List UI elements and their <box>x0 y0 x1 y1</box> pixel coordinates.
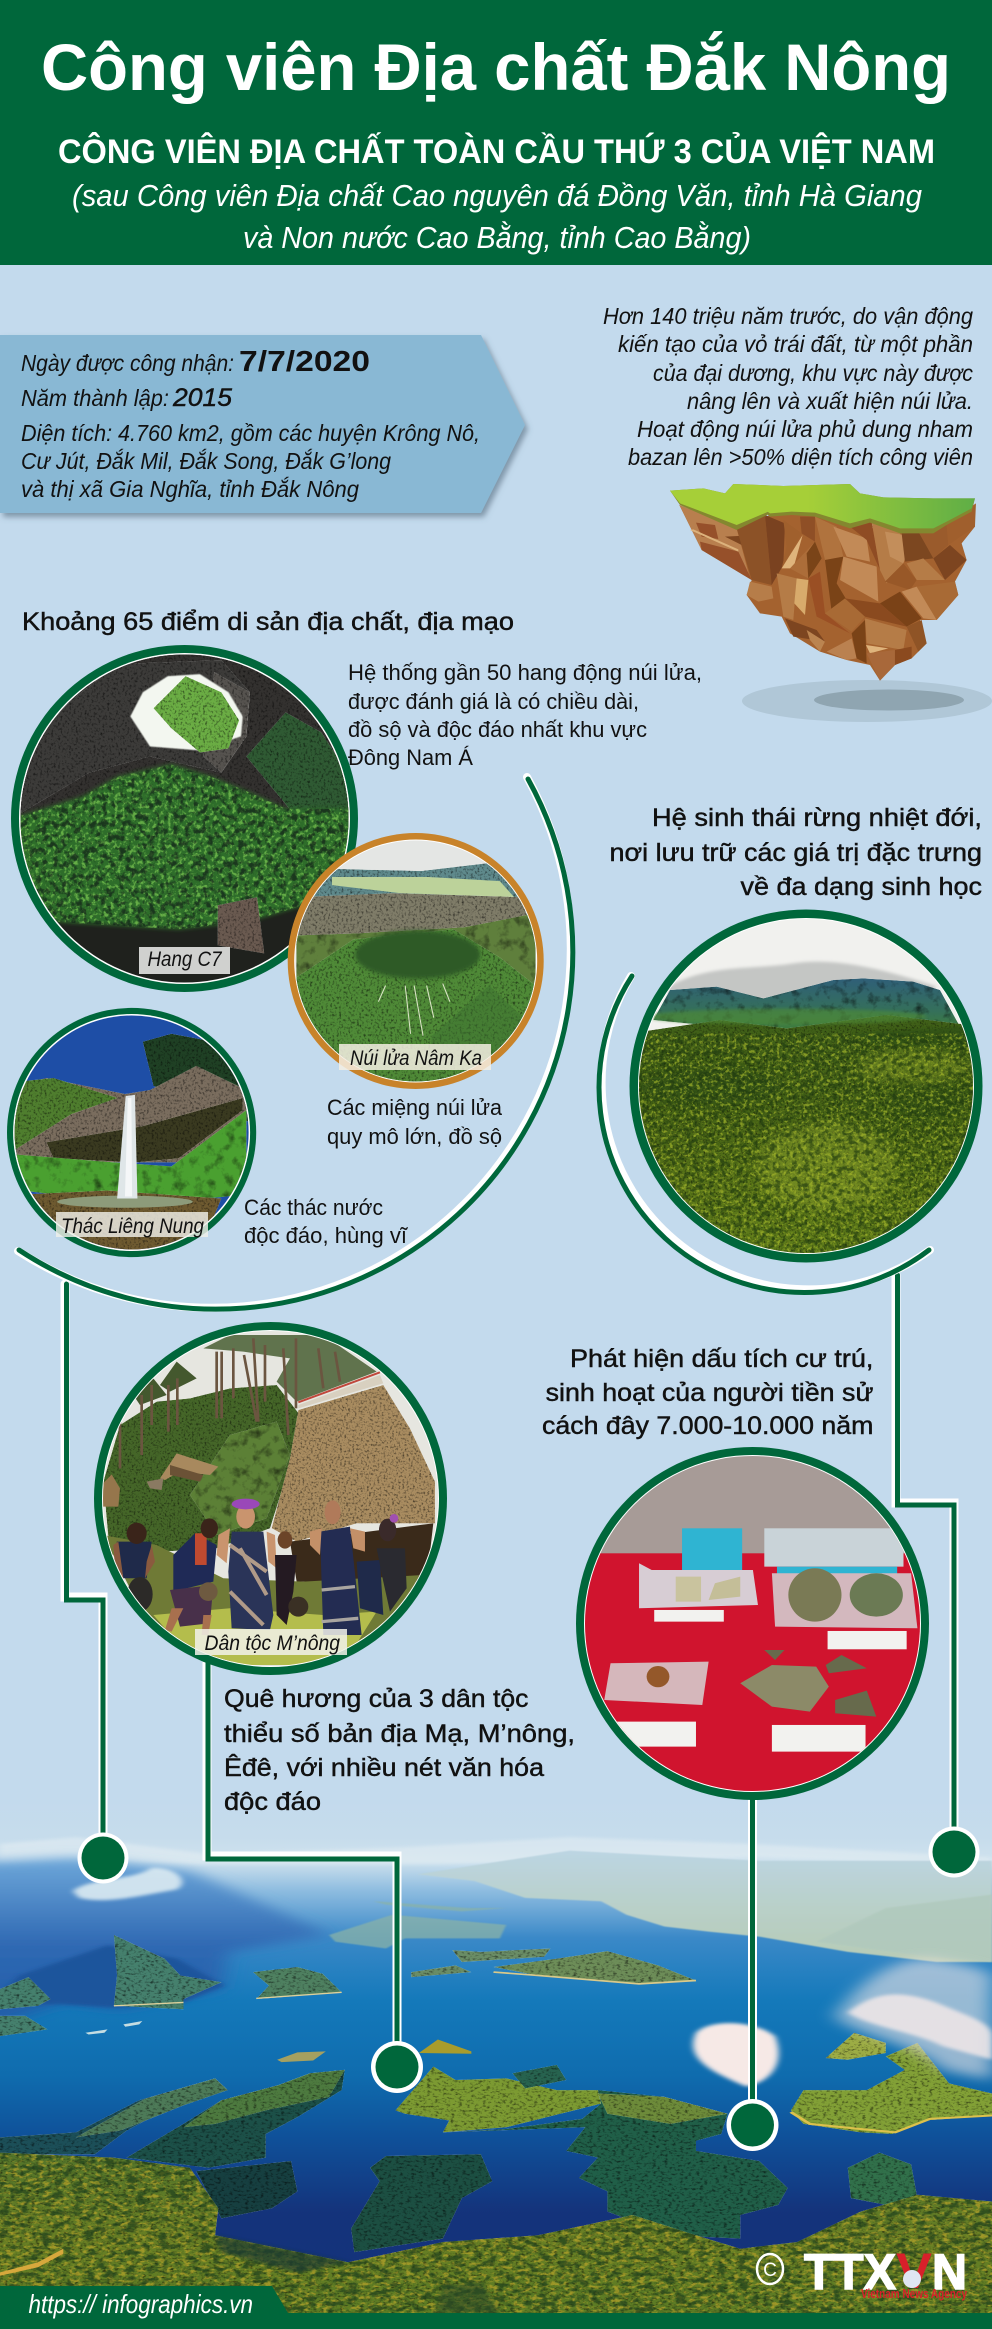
text: formation history: Hơn 140 triệu năm trước, do vận động <box>603 303 973 329</box>
caption: Nui lua Nam Ka: Núi lửa Nâm Ka <box>350 1047 482 1070</box>
text: ethnic communities: Quê hương của 3 dân tộc <box>224 1685 528 1713</box>
text: formation history: Hoạt động núi lửa phủ dung nham <box>637 416 973 442</box>
panel: key facts arrow: Ngày được công nhận: <box>21 350 234 376</box>
panel: key facts arrow: Cư Jút, Đắk Mil, Đắk Song, Đắk G’long <box>21 448 391 474</box>
text: volcanic craters: quy mô lớn, đồ sộ <box>327 1124 502 1149</box>
text: volcanic caves <box>348 660 702 770</box>
panel: key facts arrow: Diện tích: 4.760 km2, gồm các huyện Krông Nô, <box>21 420 480 446</box>
connector: culture to lake <box>207 1660 423 2093</box>
photo circle: Hang C7 <box>11 645 358 992</box>
logo: TTXVN: N <box>932 2244 967 2300</box>
text: ethnic communities <box>224 1685 575 1816</box>
text: waterfalls: Các thác nước <box>244 1195 383 1220</box>
text: formation history: kiến tạo của vỏ trái đất, từ một phần <box>618 331 973 357</box>
text: ethnic communities: thiểu số bản địa Mạ, M’nông, <box>224 1720 575 1748</box>
heading: heritage sites: Khoảng 65 điểm di sản địa chất, địa mạo <box>22 608 514 636</box>
panel: key facts arrow <box>0 335 525 513</box>
icon: floating rock island <box>670 484 976 681</box>
panel: key facts arrow: Năm thành lập: <box>21 385 169 411</box>
text: formation history: bazan lên >50% diện tích công viên <box>628 444 973 470</box>
heading: prehistoric traces: cách đây 7.000-10.000 năm <box>542 1412 873 1440</box>
photo circle: Thac Lieng Nung <box>0 1002 257 1259</box>
text: volcanic craters: Các miệng núi lửa <box>327 1095 503 1120</box>
photo circle: tropical forest <box>630 910 983 1263</box>
logo: TTXVN: TTX <box>804 2244 896 2300</box>
logo: TTXVN <box>757 2243 968 2301</box>
logo: TTXVN: V <box>896 2243 933 2299</box>
text: ethnic communities: độc đáo <box>224 1788 321 1816</box>
heading: forest ecosystem: Hệ sinh thái rừng nhiệt đới, <box>652 804 982 832</box>
subtitle note: và Non nước Cao Bằng, tỉnh Cao Bằng) <box>243 220 751 255</box>
header band <box>0 0 992 265</box>
arc: heritage group bracket <box>18 777 573 1309</box>
panel: key facts arrow: và thị xã Gia Nghĩa, tỉnh Đắk Nông <box>21 476 359 502</box>
photo: lake and forested islands <box>0 1800 992 2329</box>
subtitle: CÔNG VIÊN ĐỊA CHẤT TOÀN CẦU THỨ 3 CỦA VIỆT NAM <box>58 132 935 171</box>
title: Công viên Địa chất Đắk Nông <box>41 30 951 104</box>
text: formation history <box>603 303 973 470</box>
panel: key facts arrow: 2015 <box>172 384 232 412</box>
text: waterfalls: độc đáo, hùng vĩ <box>244 1223 408 1248</box>
text: volcanic caves: được đánh giá là có chiều dài, <box>348 689 639 714</box>
heading: prehistoric traces <box>542 1345 873 1440</box>
text: formation history: của đại dương, khu vực này được <box>653 360 973 386</box>
footer url: https:// infographics.vn <box>28 2289 253 2319</box>
text: formation history: nâng lên và xuất hiện núi lửa. <box>687 388 973 414</box>
heading: prehistoric traces: Phát hiện dấu tích cư trú, <box>570 1345 873 1373</box>
heading: prehistoric traces: sinh hoạt của người tiền sử <box>546 1379 873 1407</box>
heading: forest ecosystem <box>610 804 982 901</box>
text: volcanic caves: Đông Nam Á <box>348 745 473 770</box>
text: volcanic caves: đồ sộ và độc đáo nhất khu vực <box>348 717 647 742</box>
arc: forest bracket <box>599 976 930 1292</box>
footer band <box>0 2286 992 2329</box>
subtitle note: (sau Công viên Địa chất Cao nguyên đá Đồng Văn, tỉnh Hà Giang <box>72 178 922 213</box>
photo circle: Nui lua Nam Ka <box>286 833 550 1090</box>
caption: Thac Lieng Nung: Thác Liêng Nung <box>61 1215 204 1238</box>
caption: Dan toc M'nong: Dân tộc M’nông <box>204 1632 340 1655</box>
heading: forest ecosystem: nơi lưu trữ các giá trị đặc trưng <box>610 839 982 867</box>
caption: Hang C7: Hang C7 <box>148 948 223 971</box>
connector: heritage arc to lake <box>65 1284 128 1884</box>
text: volcanic craters <box>327 1095 503 1149</box>
connector: forest to lake <box>896 1275 980 1878</box>
connector: prehistory to lake <box>726 1795 778 2151</box>
text: volcanic caves: Hệ thống gần 50 hang động núi lửa, <box>348 660 702 685</box>
icon: floating rock shadow <box>742 680 992 722</box>
text: ethnic communities: Êđê, với nhiều nét văn hóa <box>224 1753 544 1782</box>
subtitle note <box>72 178 922 255</box>
photo circle: M'nong people <box>94 1322 450 1675</box>
text: waterfalls <box>244 1195 408 1248</box>
heading: forest ecosystem: về đa dạng sinh học <box>740 873 982 901</box>
logo: TTXVN: C <box>763 2260 777 2281</box>
photo circle: prehistoric artefacts <box>569 1447 930 1800</box>
panel: key facts arrow: 7/7/2020 <box>239 346 370 378</box>
